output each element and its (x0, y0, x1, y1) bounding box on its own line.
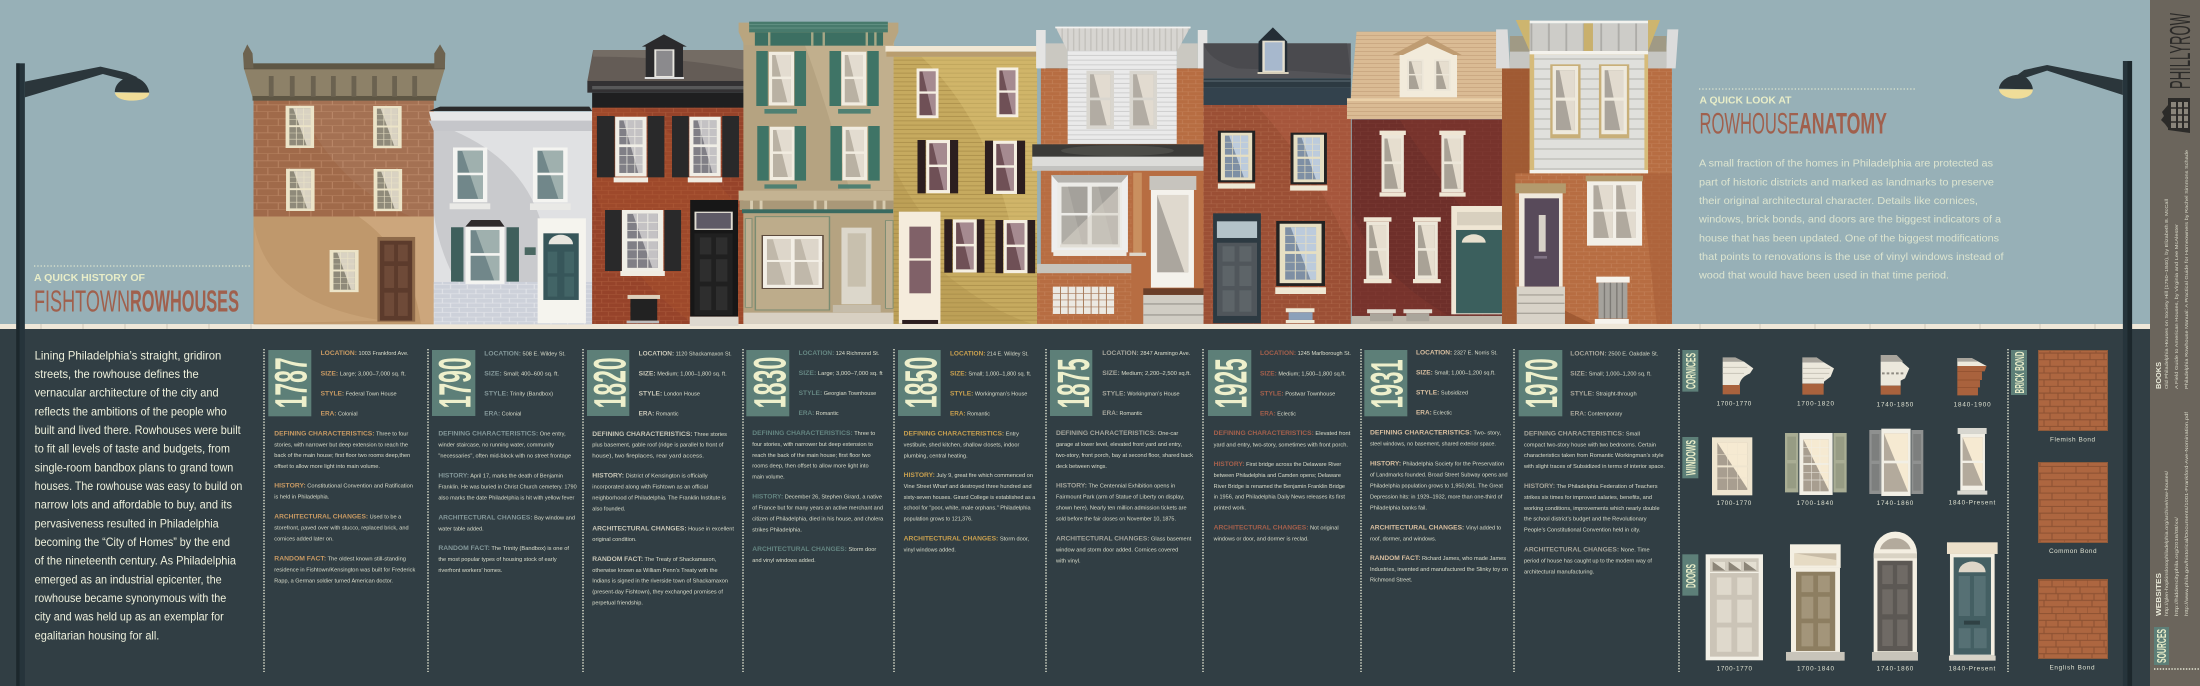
anatomy paragraph: house that has been updated. One of the biggest modifications (1699, 233, 1999, 244)
facts 1970: with slight traces of Subsidized in terms of interior space. (1524, 464, 1665, 470)
facts 1830 (752, 350, 883, 564)
facts 1790: the most popular types of housing stock of early (438, 557, 557, 563)
facts 1925: between Philadelphia and Camden opens; Delaware (1214, 473, 1341, 479)
sidebar: books: BOOKS (2156, 362, 2163, 389)
facts 1875: Fairmount Park (arm of Statue of Liberty on display, (1056, 495, 1184, 501)
facts 1925: River Bridge is renamed the Benjamin Franklin Bridge (1214, 484, 1345, 490)
swatch: english bond (2038, 580, 2108, 658)
facts 1931: ERA: Eclectic (1416, 410, 1452, 417)
door 1740-1860 (1872, 532, 1918, 661)
intro paragraph: vernacular architecture of the city and (35, 387, 219, 400)
facts 1790: RANDOM FACT: The Trinity (Bandbox) is one of (438, 545, 570, 552)
swatch: flemish bond (2038, 350, 2108, 430)
year badge 1925 (1206, 350, 1257, 416)
facts 1970: working conditions, improvements which nearly double (1524, 506, 1660, 512)
column: 1787 (266, 350, 416, 584)
facts 1931: RANDOM FACT: Richard James, who made James (1370, 555, 1506, 562)
facts 1790: STYLE: Trinity (Bandbox) (484, 391, 553, 398)
facts 1970: STYLE: Straight-through (1570, 390, 1637, 397)
facts 1787: offset to allow more light into main volume. (274, 464, 380, 470)
year badge 1787: 1787 (266, 357, 317, 408)
year badge 1970: 1970 (1516, 358, 1567, 408)
facts 1790: LOCATION: 508 E. Wildey St. (484, 351, 566, 358)
facts 1790: HISTORY: April 17, marks the death of Benjamin (438, 472, 563, 479)
cornice 1700-1770 (1723, 357, 1753, 394)
tab: windows (1682, 437, 1698, 478)
facts 1820: otherwise known as William Penn’s Treaty with the (592, 568, 718, 574)
facts 1820: house), two fireplaces, rear yard access. (592, 454, 704, 460)
facts 1970 (1524, 350, 1665, 575)
facts 1820: original condition. (592, 537, 637, 543)
facts 1820: plus basement, gable roof (ridge is parallel to front of (592, 443, 724, 449)
facts 1970: SIZE: Small; 1,000–1,200 sq. ft. (1570, 370, 1652, 377)
year badge 1875: 1875 (1048, 358, 1099, 408)
facts 1790 (438, 351, 577, 574)
tab: doors: DOORS (1682, 564, 1698, 588)
facts 1820: ERA: Romantic (639, 411, 679, 418)
row of houses, middle part (739, 22, 1502, 324)
facts 1850: Vine Street Wharf and destroyed three hundred and (904, 484, 1032, 490)
facts 1850: LOCATION: 214 E. Wildey St. (950, 350, 1029, 357)
facts 1931: Industries, invented and manufactured the Slinky toy on (1370, 567, 1508, 573)
facts 1787: HISTORY: Constitutional Convention and Ratification (274, 483, 413, 490)
facts 1875: HISTORY: The Centennial Exhibition opens in (1056, 483, 1175, 490)
facts 1875: ERA: Romantic (1102, 410, 1143, 417)
bond labels: Flemish Bond (2050, 436, 2095, 444)
date labels (1717, 401, 1996, 673)
facts 1790: winder staircase, no running water, community (438, 443, 554, 449)
facts 1875 (1056, 350, 1193, 564)
facts 1787 (274, 350, 416, 584)
column: 1931 (1362, 350, 1508, 584)
facts 1787: DEFINING CHARACTERISTICS: Three to four (274, 430, 409, 437)
date labels: 1700-1770 (1717, 666, 1752, 673)
facts 1790: Franklin. He was buried in Christ Church cemetery. 1790 (438, 484, 577, 490)
facts 1925: LOCATION: 1245 Marlborough St. (1260, 350, 1351, 357)
facts 1970: period of house has caught up to the modern way of (1524, 558, 1652, 564)
facts 1931: Philadelphia population grows to 1,950,961. The Great (1370, 484, 1504, 490)
year badge 1931 (1362, 350, 1413, 416)
intro paragraph: becoming the “City of Homes” by the end (35, 536, 230, 549)
street and lower panel background (0, 328, 2200, 686)
facts 1830: main volume. (752, 475, 785, 481)
facts 1925: HISTORY: First bridge across the Delaware River (1214, 461, 1342, 468)
facts 1970: architectural manufacturing. (1524, 569, 1594, 575)
facts 1820: (present-day Fishtown), they exchanged promises of (592, 590, 724, 596)
facts 1875: ARCHITECTURAL CHANGES: Glass basement (1056, 535, 1192, 542)
house 5: 1850 (885, 46, 1039, 324)
intro paragraph: rowhouse became synonymous with the (35, 592, 226, 605)
heading: a quick look at rowhouse anatomy: A QUICK LOOK AT (1700, 95, 1792, 106)
facts 1970: DEFINING CHARACTERISTICS: Small (1524, 430, 1640, 437)
tab: brick bond: BRICK BOND (2012, 351, 2027, 394)
facts 1830: citizen of Philadelphia, died in his house, and cholera (752, 516, 883, 522)
facts 1970: HISTORY: The Philadelphia Federation of Teachers (1524, 483, 1658, 490)
swatch: common bond (2038, 462, 2108, 542)
house 1: 1787 (243, 44, 445, 324)
facts 1931: HISTORY: Philadelphia Society for the Preservation (1370, 461, 1504, 468)
facts 1790: "necessaries", often mid-block with no street frontage (438, 454, 571, 460)
facts 1925: in 1956, and Philadelphia Daily News releases its first (1214, 495, 1345, 501)
intro paragraph: single-room bandbox plans to grand town (35, 461, 233, 474)
year badge 1790: 1790 (430, 357, 481, 408)
facts 1830: reach the back of the main house; first floor two (752, 453, 871, 459)
right sidebar band (2150, 0, 2200, 686)
facts 1931: LOCATION: 2327 E. Norris St. (1416, 350, 1498, 357)
year badge 1820 (585, 350, 636, 416)
facts 1875: LOCATION: 2847 Aramingo Ave. (1102, 350, 1190, 357)
bond labels: English Bond (2050, 664, 2095, 672)
tab: windows: WINDOWS (1682, 440, 1698, 475)
intro paragraph: reflects the ambitions of the people who (35, 405, 227, 418)
facts 1925: DEFINING CHARACTERISTICS: Elevated front (1214, 430, 1351, 437)
facts 1850: STYLE: Workingman’s House (950, 390, 1027, 397)
facts 1787: residence in Fishtown/Kensington was built for Frederick (274, 567, 416, 573)
date labels: 1700-1770 (1717, 401, 1752, 408)
tab: cornices: CORNICES (1682, 353, 1698, 389)
facts 1830: LOCATION: 124 Richmond St. (799, 350, 879, 357)
door 1700-1840 (1786, 544, 1845, 661)
house 4: 1830 (739, 22, 898, 324)
sidebar: websites: http://hiddencityphila.org/2016/08/xx/ (2174, 516, 2179, 616)
house 2: 1790 (429, 107, 592, 324)
facts 1787: back of the main house; first floor two rooms deep,then (274, 453, 410, 459)
anatomy paragraph (1698, 159, 2004, 282)
facts 1875: DEFINING CHARACTERISTICS: One-car (1056, 430, 1179, 437)
facts 1790: SIZE: Small; 400–600 sq. ft. (484, 371, 559, 378)
tab: brick bond (2011, 350, 2027, 395)
year badge 1850: 1850 (896, 357, 947, 408)
sidebar: phillyrow logo (2161, 13, 2197, 133)
anatomy paragraph: their original architectural character. Details like cornices, (1699, 196, 1978, 207)
house 3: 1820 (587, 34, 745, 326)
facts 1787: ARCHITECTURAL CHANGES: Used to be a (274, 514, 401, 521)
house 7: 1925 (1204, 27, 1351, 324)
intro paragraph: emerged as an industrial epicenter, the (35, 573, 222, 586)
intro paragraph: narrow lots and affordable to buy, and its (35, 499, 232, 512)
facts 1970: ERA: Contemporary (1570, 411, 1623, 418)
facts 1875: STYLE: Workingman’s House (1102, 390, 1180, 397)
facts 1820 (592, 351, 735, 607)
facts 1875: sold before the fair closes on November 10, 1875. (1056, 517, 1176, 523)
intro paragraph: of the nineteenth century. As Philadelphia (35, 555, 236, 568)
facts 1830: four stories, with narrower but deep extension to (752, 442, 873, 448)
bond labels: Common Bond (2049, 548, 2097, 555)
facts 1787: ERA: Colonial (321, 410, 358, 417)
facts 1850: SIZE: Small; 1,000–1,800 sq. ft. (950, 370, 1031, 377)
intro paragraph: built and lived there. Rowhouses were built (35, 424, 241, 437)
anatomy paragraph: that points to renovations is the use of vinyl windows instead of (1699, 252, 2004, 263)
date labels: 1840-Present (1949, 666, 1996, 673)
sidebar: websites: http://www.phila.gov/historical/Documents/1001-Frankford-Ave-Nomination.pdf (2184, 411, 2189, 616)
facts 1970: the school district’s budget and the Revolutionary (1524, 517, 1647, 523)
left street lamp (16, 63, 149, 686)
facts 1925: SIZE: Medium; 1,500–1,800 sq.ft. (1260, 370, 1346, 377)
row of houses, left part (243, 34, 745, 326)
year badge 1790 (430, 350, 481, 416)
facts 1787: storefront, paved over with stucco, replaced brick, and (274, 526, 409, 532)
facts 1850: ARCHITECTURAL CHANGES: Storm door, (904, 535, 1029, 542)
right street lamp (1999, 61, 2132, 686)
door 1700-1770 (1706, 554, 1763, 660)
sidewalk (0, 324, 2150, 329)
facts 1970: LOCATION: 2500 E. Oakdale St. (1570, 350, 1658, 357)
sidebar: books (2156, 149, 2189, 389)
heading: a quick history of fishtown rowhouses: FISHTOWN (34, 284, 130, 319)
cornice 1700-1820 (1802, 357, 1834, 395)
column: 1850 (896, 350, 1035, 553)
date labels: 1700-1770 (1717, 500, 1752, 507)
facts 1787: LOCATION: 1003 Frankford Ave. (321, 350, 409, 357)
column: 1830 (744, 350, 883, 564)
facts 1790: also marks the date Philadelphia is hit with yellow fever (438, 495, 575, 501)
facts 1787: SIZE: Large; 3,000–7,000 sq. ft. (321, 370, 406, 377)
facts 1931: DEFINING CHARACTERISTICS: Two- story, (1370, 430, 1501, 437)
cornice 1740-1850 (1881, 355, 1909, 395)
facts 1850: ERA: Romantic (950, 410, 990, 417)
facts 1830: ARCHITECTURAL CHANGES: Storm door (752, 546, 877, 553)
intro paragraph: pervasiveness resulted in Philadelphia (35, 517, 219, 530)
dotted column dividers (264, 349, 2008, 672)
facts 1970: ARCHITECTURAL CHANGES: None. Time (1524, 546, 1650, 553)
facts 1790: ARCHITECTURAL CHANGES: Bay window and (438, 514, 575, 521)
facts 1830: HISTORY: December 26, Stephen Girard, a native (752, 493, 882, 500)
facts 1970: compact two-story house with two bedrooms. Certain (1524, 442, 1656, 448)
facts 1850: sixty-seven houses. Girard College is established as a (904, 495, 1035, 501)
intro paragraph: houses. The rowhouse was easy to build on (35, 480, 242, 493)
facts 1850: population grows to 121,376. (904, 517, 973, 523)
facts 1830: DEFINING CHARACTERISTICS: Three to (752, 430, 875, 437)
window 1740-1860 (1869, 429, 1923, 496)
facts 1790: riverfront workers’ homes. (438, 568, 502, 574)
anatomy paragraph: A small fraction of the homes in Philadelphia are protected as (1699, 159, 1993, 170)
facts 1931: SIZE: Small; 1,000–1,200 sq.ft. (1416, 370, 1496, 377)
facts 1820: incorporated along with Fishtown as an official (592, 484, 708, 490)
facts 1875: window and storm door added. Cornices covered (1056, 547, 1178, 553)
facts 1830: of France but for many years an active merchant and (752, 505, 883, 511)
facts 1931: Philadelphia banks fail. (1370, 505, 1427, 511)
facts 1787: STYLE: Federal Town House (321, 390, 397, 397)
sidebar: books: Old Philadelphia Houses on Society Hill (1750–1840), by Elizabeth B. McCall (2164, 199, 2169, 389)
facts 1830: STYLE: Georgian Townhouse (799, 390, 876, 397)
tab: doors (1682, 554, 1698, 596)
facts 1820: RANDOM FACT: The Treaty of Shackamaxon, (592, 556, 716, 563)
facts 1820: SIZE: Medium; 1,000–1,800 sq. ft. (639, 371, 727, 378)
heading: a quick look at rowhouse anatomy (1699, 89, 1915, 140)
facts 1787: stories, with narrower but deep extension to reach the (274, 442, 408, 448)
year badge 1925: 1925 (1206, 358, 1257, 408)
heading: a quick look at rowhouse anatomy: ROWHOUSE (1700, 107, 1799, 140)
facts 1931: ARCHITECTURAL CHANGES: Vinyl added to (1370, 524, 1501, 531)
facts 1875: shown here). Nearly ten million admission tickets are (1056, 506, 1187, 512)
facts 1820: perpetual friendship. (592, 601, 643, 607)
facts 1830: and vinyl windows added. (752, 558, 816, 564)
column: 1875 (1048, 350, 1193, 564)
facts 1830: SIZE: Large; 3,000–7,000 sq. ft (799, 370, 883, 377)
intro paragraph: to fit all levels of taste and budgets, from (35, 443, 230, 456)
facts 1931: Richmond Street. (1370, 578, 1412, 584)
facts 1875: SIZE: Medium; 2,200–2,500 sq.ft. (1102, 370, 1191, 377)
facts 1790: DEFINING CHARACTERISTICS: One entry, (438, 431, 566, 438)
sidebar: websites (2156, 411, 2189, 616)
column: 1790 (430, 350, 577, 574)
facts 1850: vestibule, shed kitchen, shallow closets, indoor (904, 442, 1020, 448)
facts 1925: yard and entry, two-story, sometimes with front porch. (1214, 442, 1348, 448)
year badge 1830: 1830 (744, 357, 795, 408)
facts 1787: Rapp, a German soldier turned American doctor. (274, 578, 393, 584)
facts 1931: STYLE: Subsidized (1416, 390, 1468, 397)
facts 1925: printed work. (1214, 506, 1246, 512)
anatomy paragraph: windows, brick bonds, and doors are the biggest indicators of a (1698, 215, 2001, 226)
date labels: 1740-1860 (1877, 666, 1914, 673)
facts 1820: Indians is signed in the riverside town of Shackamaxon (592, 579, 728, 585)
facts 1787: is held in Philadelphia. (274, 495, 329, 501)
date labels: 1840-Present (1949, 500, 1996, 507)
facts 1850 (904, 350, 1035, 553)
year badge 1850 (896, 350, 947, 416)
facts 1931: roof, dormer, and windows. (1370, 536, 1436, 542)
facts 1875: two-story, front porch, bay at second floor, shared back (1056, 453, 1193, 459)
date labels: 1740-1860 (1877, 500, 1914, 507)
house 9: 1970 (1496, 20, 1678, 324)
facts 1850: vinyl windows added. (904, 547, 956, 553)
anatomy paragraph: part of historic districts and marked as landmarks to preserve (1699, 177, 1994, 188)
facts 1925: STYLE: Postwar Townhouse (1260, 390, 1335, 397)
facts 1925: ERA: Eclectic (1260, 410, 1296, 417)
intro paragraph: egalitarian housing for all. (35, 629, 159, 642)
facts 1820: also founded. (592, 506, 625, 512)
heading: a quick history of fishtown rowhouses: ROWHOUSES (130, 284, 239, 319)
facts 1820: ARCHITECTURAL CHANGES: House in excellent (592, 525, 735, 532)
facts 1850: plumbing, central heating. (904, 453, 968, 459)
facts 1925: ARCHITECTURAL CHANGES: Not original (1214, 524, 1339, 531)
facts 1931: of Landmarks founded. Broad Street Subway opens and (1370, 473, 1508, 479)
intro paragraph: Lining Philadelphia’s straight, gridiron (35, 349, 221, 362)
heading: a quick look at rowhouse anatomy: ANATOMY (1799, 107, 1887, 140)
facts 1830: rooms deep, then offset to allow more light into (752, 464, 869, 470)
heading: a quick history of fishtown rowhouses: A QUICK HISTORY OF (34, 273, 145, 284)
row of houses, right part (1496, 20, 1678, 324)
house 8: 1931 (1347, 32, 1502, 324)
facts 1830: ERA: Romantic (799, 410, 839, 417)
facts 1931: steel windows, no basement, shared exterior space. (1370, 442, 1496, 448)
facts 1970: characteristics taken from Romantic Workingman’s style (1524, 453, 1664, 459)
bond labels (2049, 436, 2097, 672)
facts 1925: windows or door, and dormer is reclad. (1214, 536, 1309, 542)
facts 1970: People’s Constitutional Convention held in city. (1524, 528, 1640, 534)
sidebar: books: A Field Guide to American Houses, by Virginia and Lee McAlester (2174, 223, 2179, 389)
facts 1820: DEFINING CHARACTERISTICS: Three stories (592, 431, 727, 438)
house 6: 1875 (1032, 27, 1210, 324)
facts 1820: HISTORY: District of Kensington is officially (592, 473, 708, 480)
year badge 1970 (1516, 350, 1567, 416)
sky background (0, 0, 2150, 325)
year badge 1787 (266, 350, 317, 416)
date labels: 1700-1820 (1797, 401, 1834, 408)
cornice 1840-1900 (1957, 358, 1987, 395)
door 1840-present (1947, 542, 1998, 661)
window 1700-1840 (1785, 433, 1847, 495)
anatomy paragraph: wood that would have been used in that time period. (1698, 271, 1949, 282)
date labels: 1840-1900 (1954, 401, 1991, 408)
year badge 1875 (1048, 350, 1099, 416)
sidebar: websites: WEBSITES (2156, 573, 2163, 616)
tab: cornices (1682, 350, 1698, 392)
facts 1850: school for "poor, white, male orphans." Philadelphia (904, 506, 1031, 512)
date labels: 1700-1840 (1797, 500, 1834, 507)
facts 1787: cornices added later on. (274, 537, 334, 543)
facts 1970: strikes six times for improved salaries, benefits, and (1524, 495, 1652, 501)
facts 1875: deck between wings. (1056, 464, 1107, 470)
facts 1820: LOCATION: 1120 Shackamaxon St. (639, 351, 732, 358)
date labels: 1740-1850 (1877, 402, 1914, 409)
facts 1790: ERA: Colonial (484, 411, 521, 418)
column: 1925 (1206, 350, 1351, 542)
year badge 1830 (744, 350, 795, 416)
panel: anatomy gallery (1682, 350, 1998, 673)
facts 1787: RANDOM FACT: The oldest known still-standing (274, 555, 406, 562)
facts 1931: Depression hits: in 1929–1932, more than one-third of (1370, 494, 1503, 500)
panel: brick bonds (2011, 350, 2108, 672)
heading: a quick history of fishtown rowhouses (34, 266, 250, 319)
facts 1820: STYLE: London House (639, 391, 700, 398)
facts 1830: strikes Philadelphia. (752, 527, 802, 533)
facts 1931 (1370, 350, 1508, 584)
intro paragraph (35, 349, 242, 642)
sidebar: sources tab (2154, 627, 2200, 669)
facts 1820: neighborhood of Philadelphia. The Franklin Institute is (592, 495, 726, 501)
sidebar: books: Philadelphia Rowhouse Manual: A Practical Guide for Homeowners by Rachel Simmons Schade (2184, 149, 2189, 389)
facts 1875: garage at lower level, elevated front yard and entry, (1056, 442, 1182, 448)
column: 1820 (585, 350, 735, 607)
date labels: 1700-1840 (1797, 666, 1834, 673)
sidebar: websites: http://glen-hopkinslosophiladelphia.org/archive/row-houses/ (2164, 470, 2169, 616)
facts 1850: HISTORY: July 9, great fire which commenced on (904, 472, 1033, 479)
facts 1925 (1214, 350, 1351, 542)
intro paragraph: city and was held up as an exemplar for (35, 611, 224, 624)
sidebar: sources tab: SOURCES (2154, 629, 2169, 663)
window 1840-present (1957, 428, 1987, 495)
year badge 1820: 1820 (585, 357, 636, 408)
facts 1790: water table added. (438, 526, 484, 532)
facts 1875: with vinyl. (1056, 558, 1081, 564)
window 1700-1770 (1712, 437, 1752, 495)
facts 1850: DEFINING CHARACTERISTICS: Entry (904, 430, 1019, 437)
column: 1970 (1516, 350, 1665, 575)
intro paragraph: streets, the rowhouse defines the (35, 368, 199, 381)
year badge 1931: 1931 (1362, 359, 1413, 408)
